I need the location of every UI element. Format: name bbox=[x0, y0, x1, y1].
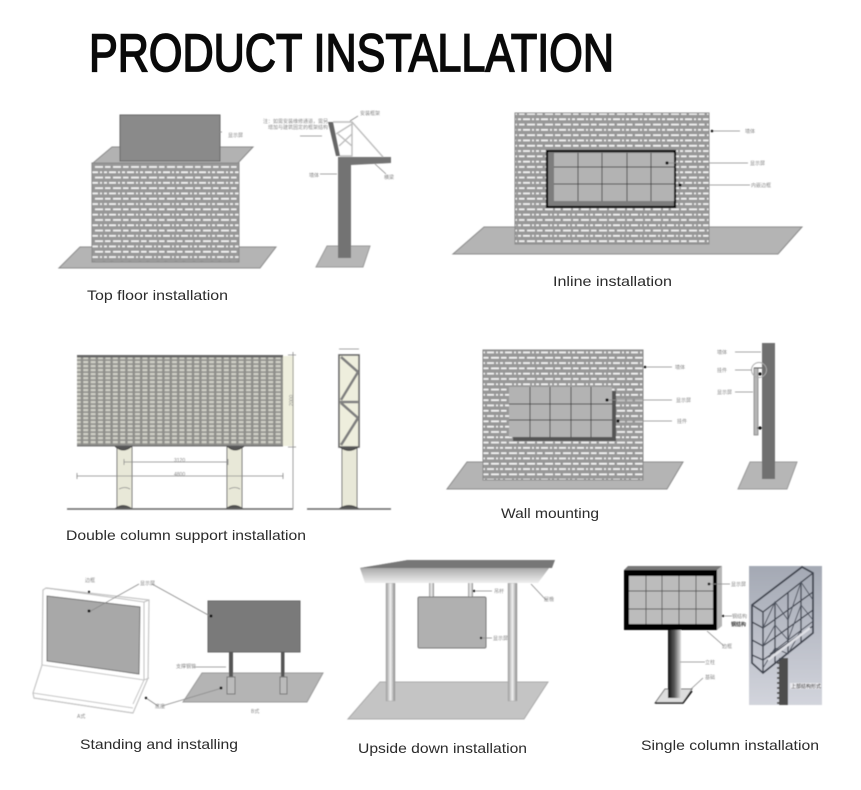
left drawing: freestanding cabinet: 边框 bbox=[85, 577, 95, 584]
side view: truss frame on column bbox=[307, 349, 391, 509]
front view: screen on two columns with dimensions: 3120 bbox=[174, 458, 185, 464]
panel: top floor installation bbox=[59, 110, 394, 303]
front view: screen mounted on wall: 挂件 bbox=[677, 418, 687, 425]
panel: single column installation bbox=[624, 566, 822, 753]
drawing: screen hung below canopy: 屋檐 bbox=[544, 596, 554, 603]
drawing: screen hung below canopy bbox=[348, 560, 555, 719]
drawing: screen embedded in wall: 墙体 bbox=[745, 128, 755, 135]
left drawing: freestanding cabinet: 显示屏 bbox=[140, 581, 155, 587]
front view: screen on two columns with dimensions: 4800 bbox=[174, 472, 185, 478]
right drawing: screen on legs bbox=[152, 584, 323, 715]
drawing: screen embedded in wall bbox=[453, 113, 802, 254]
caption: Standing and installing bbox=[80, 736, 238, 752]
caption: Wall mounting bbox=[501, 505, 599, 521]
front view: screen mounted on wall: 墙体 bbox=[675, 364, 685, 371]
left drawing: freestanding cabinet: A式 bbox=[77, 713, 85, 720]
panel: standing and installing bbox=[33, 577, 323, 752]
drawing: screen on one column: 显示屏 bbox=[731, 582, 746, 588]
left drawing: freestanding cabinet bbox=[33, 577, 165, 720]
caption: Inline installation bbox=[553, 273, 672, 289]
drawing: screen on one column: 钢结构 bbox=[731, 621, 746, 628]
caption: Upside down installation bbox=[358, 740, 527, 756]
drawing: screen on one column: 立柱 bbox=[705, 659, 715, 666]
drawing: screen embedded in wall: 内嵌边框 bbox=[751, 182, 771, 189]
right drawing: screen on legs: B式 bbox=[251, 708, 259, 715]
side view: roof truss and column: 注：如需安装维修通道，需另 bbox=[263, 118, 328, 125]
side view: roof truss and column: 墙体 bbox=[309, 172, 319, 179]
side view: roof truss and column: 安装框架 bbox=[360, 110, 380, 117]
drawing: screen on one column: 钢结构 bbox=[732, 613, 747, 620]
caption: Top floor installation bbox=[87, 287, 228, 303]
drawing: screen on one column bbox=[624, 566, 747, 703]
front view: screen on roof of building: 显示屏 bbox=[228, 133, 243, 139]
drawing: screen on one column: 边框 bbox=[722, 643, 732, 650]
front view: screen on roof of building bbox=[59, 115, 276, 268]
side view: roof truss and column: 横梁 bbox=[384, 174, 394, 181]
panel: wall mounting bbox=[447, 343, 797, 521]
side view: wall section with hanger: 显示屏 bbox=[717, 390, 732, 396]
title: PRODUCT INSTALLATION bbox=[89, 24, 614, 83]
drawing: screen on one column: 基础 bbox=[705, 674, 715, 681]
drawing: screen hung below canopy: 吊杆 bbox=[494, 588, 504, 595]
front view: screen mounted on wall: 显示屏 bbox=[676, 398, 691, 404]
panel: upside down installation bbox=[348, 560, 555, 756]
side view: roof truss and column: 增加与建筑固定的框架结构 bbox=[268, 124, 328, 131]
drawing: screen hung below canopy: 显示屏 bbox=[493, 636, 508, 642]
front view: screen on two columns with dimensions bbox=[67, 352, 296, 509]
right drawing: screen on legs: 支撑钢管 bbox=[176, 663, 196, 670]
caption: Single column installation bbox=[641, 737, 819, 753]
caption: Double column support installation bbox=[66, 527, 306, 543]
left drawing: freestanding cabinet: 底座 bbox=[155, 703, 165, 710]
photo: steel frame structure: 上部结构形式 bbox=[791, 683, 821, 690]
front view: screen on two columns with dimensions: 2000 bbox=[289, 395, 295, 406]
side view: wall section with hanger: 墙体 bbox=[717, 349, 727, 356]
drawing: screen embedded in wall: 显示屏 bbox=[750, 161, 765, 167]
front view: screen mounted on wall bbox=[447, 350, 691, 489]
side view: wall section with hanger bbox=[717, 343, 797, 489]
panel: double column support installation bbox=[66, 349, 391, 543]
side view: wall section with hanger: 挂件 bbox=[717, 367, 727, 374]
photo: steel frame structure bbox=[749, 566, 822, 705]
panel: inline installation bbox=[453, 113, 802, 289]
side view: roof truss and column bbox=[263, 110, 394, 267]
